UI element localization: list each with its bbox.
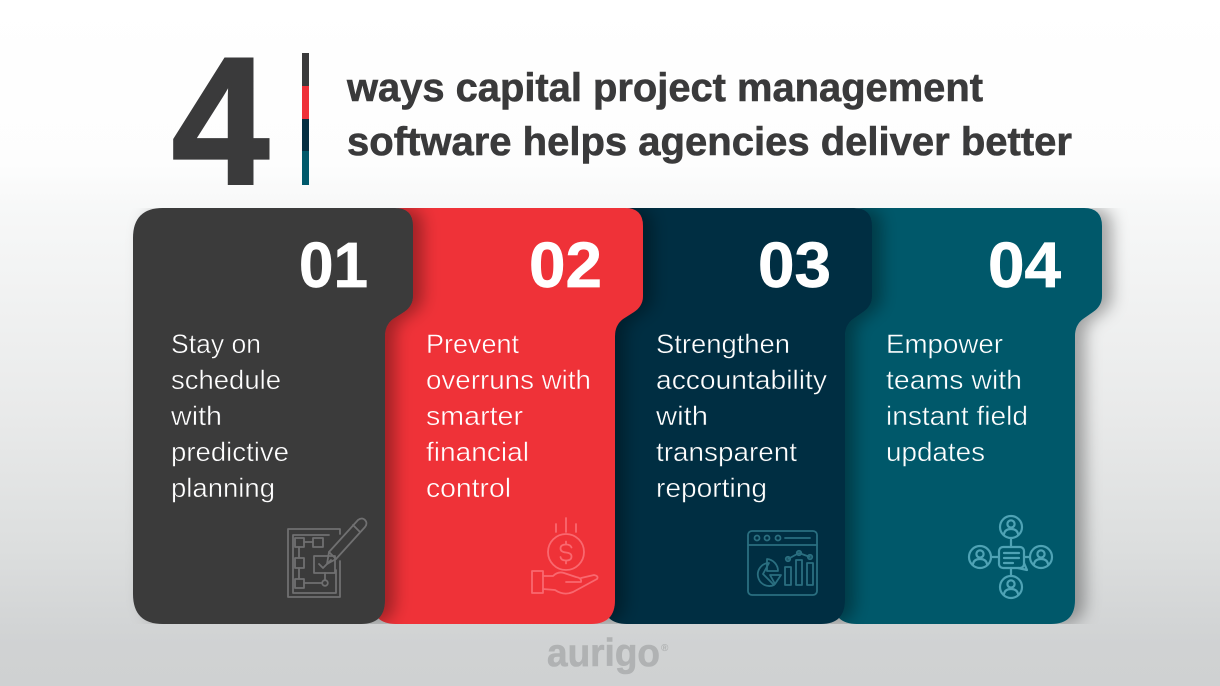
text: empower teams xyxy=(886,329,1028,467)
number 03: 03 xyxy=(758,229,831,301)
text: prevent overruns: overruns with xyxy=(426,365,591,395)
panel: step 01 xyxy=(133,208,413,624)
icon: coin over open hand xyxy=(532,518,598,594)
icon: people connected around message xyxy=(969,516,1052,598)
text: empower teams: updates xyxy=(886,437,985,467)
number 04: 04 xyxy=(988,229,1061,301)
logo: aurigo: ® xyxy=(661,643,669,654)
text: strengthen accountability: transparent xyxy=(656,437,798,467)
text: stay on schedule: planning xyxy=(171,473,275,503)
text: stay on schedule xyxy=(170,329,289,503)
title: software helps agencies deliver better xyxy=(347,120,1072,164)
text: stay on schedule: Stay on xyxy=(171,329,261,359)
text: prevent overruns: financial xyxy=(426,437,529,467)
text: prevent overruns xyxy=(426,329,591,503)
text: strengthen accountability: Strengthen xyxy=(656,329,790,359)
icon: project plan with pencil xyxy=(288,518,366,597)
colour divider bar xyxy=(302,53,309,185)
text: stay on schedule: with xyxy=(170,401,222,431)
logo: aurigo: aurigo xyxy=(547,632,660,675)
panel: step 02 xyxy=(372,208,643,624)
text: prevent overruns: smarter xyxy=(426,401,523,431)
text: prevent overruns: control xyxy=(426,473,511,503)
text: empower teams: instant field xyxy=(886,401,1028,431)
text: strengthen accountability: with xyxy=(655,401,708,431)
icon: analytics dashboard xyxy=(748,531,817,595)
title: ways capital project management xyxy=(346,66,983,110)
title xyxy=(346,66,1072,164)
panel: step 04 xyxy=(833,208,1102,624)
text: prevent overruns: Prevent xyxy=(426,329,519,359)
text: strengthen accountability: reporting xyxy=(656,473,767,503)
panel: step 03 xyxy=(603,208,872,624)
text: strengthen accountability: accountability xyxy=(656,365,828,395)
text: empower teams: Empower xyxy=(886,329,1003,359)
big number 4: 4 xyxy=(172,20,269,222)
text: strengthen accountability xyxy=(655,329,828,503)
text: stay on schedule: predictive xyxy=(171,437,289,467)
text: stay on schedule: schedule xyxy=(171,365,281,395)
number 01: 01 xyxy=(299,229,368,301)
number 02: 02 xyxy=(529,229,602,301)
text: empower teams: teams with xyxy=(886,365,1022,395)
